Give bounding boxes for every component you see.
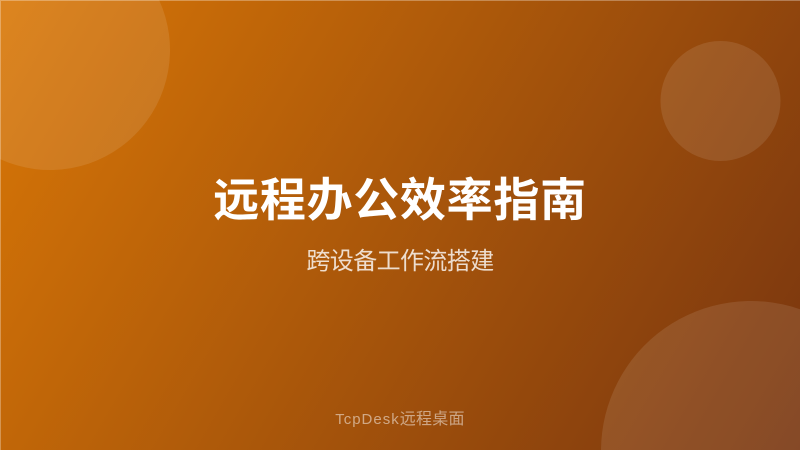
subtitle: 跨设备工作流搭建: [306, 248, 494, 275]
title: 远程办公效率指南: [213, 174, 587, 226]
circle: top right: [660, 41, 780, 161]
circle: top left: [0, 0, 170, 170]
footer brand: TcpDesk远程桌面: [335, 411, 465, 428]
circle: bottom right: [601, 301, 800, 450]
